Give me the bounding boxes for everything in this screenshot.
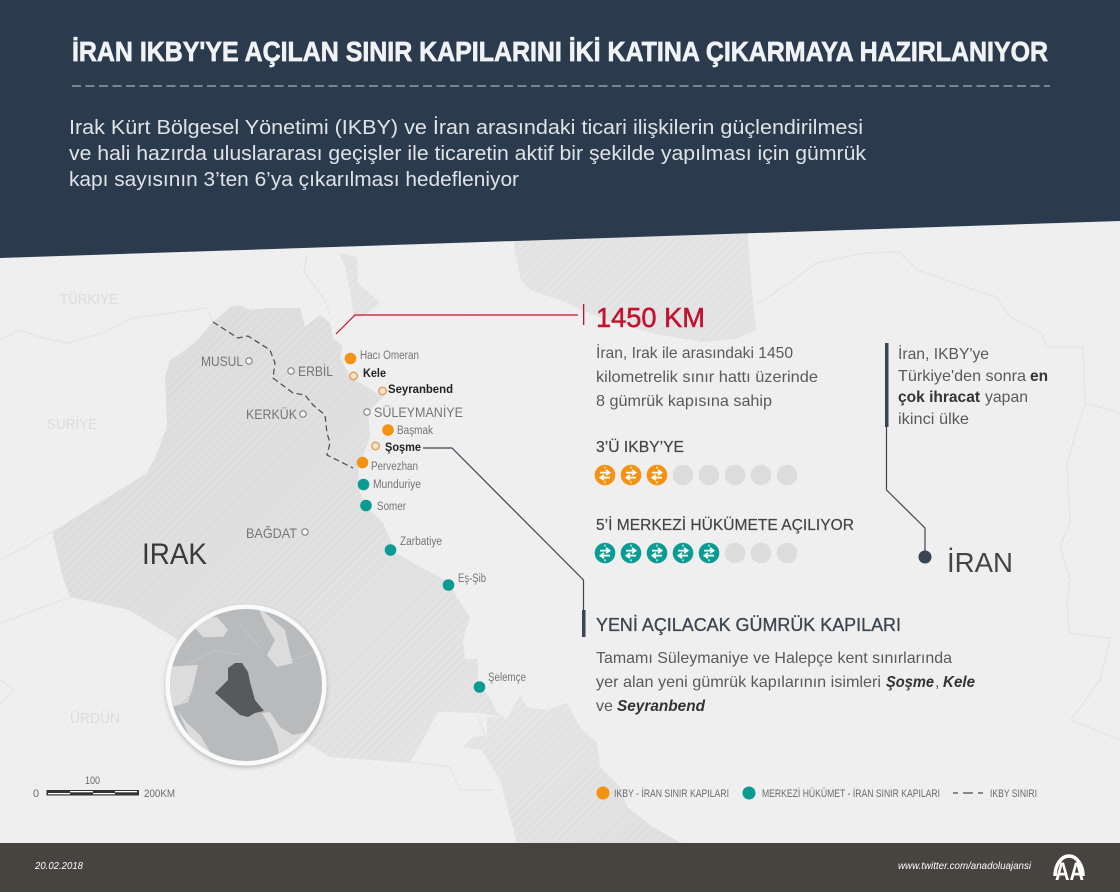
heading: 5 to central government: 5’İ MERKEZİ HÜKÜMETE AÇILIYOR (596, 515, 854, 534)
city labels: KERKÜK (246, 405, 298, 422)
heading: new customs gates: YENİ AÇILACAK GÜMRÜK KAPILARI (596, 615, 901, 635)
intro text (69, 116, 867, 191)
gate labels: Zarbatiye (400, 536, 442, 548)
gate labels: Başmak (397, 425, 433, 437)
text: new gates description: Kele (943, 674, 975, 691)
city labels: ERBİL (298, 362, 333, 379)
map: iraq (52, 305, 507, 763)
gate labels: Munduriye (373, 479, 421, 491)
header panel (0, 0, 1120, 258)
scale bar: 0 (33, 788, 39, 800)
text: new gates description: ve (596, 698, 613, 715)
gate labels: Şoşme (385, 442, 421, 454)
map: diagonal texture (0, 215, 1120, 843)
text: border description: 8 gümrük kapısına sahip (596, 393, 772, 410)
label: IRAK: IRAK (142, 538, 207, 571)
gate labels: Hacı Omeran (360, 350, 419, 362)
city labels: MUSUL (201, 353, 243, 369)
date: 20.02.2018 (34, 860, 83, 872)
gate labels: Eş-Şib (458, 573, 486, 585)
icon row: 5 of 8 gates (595, 543, 797, 563)
text: Iran export note: çok ihracat (898, 389, 981, 406)
intro text: kapı sayısının 3’ten 6’ya çıkarılması hedefleniyor (69, 169, 519, 191)
intro text: ve hali hazırda uluslararası geçişler ile ticaretin aktif bir şekilde yapılması için gümrük (69, 143, 867, 165)
city labels: BAĞDAT (246, 525, 297, 541)
text: Iran export note: İran, IKBY'ye (898, 344, 989, 363)
text: new gates description (596, 650, 975, 715)
gate labels: Şelemçe (488, 672, 526, 684)
text: Iran export note: yapan (985, 389, 1028, 406)
locator globe (165, 604, 330, 770)
icon row: 3 of 8 gates (595, 465, 797, 485)
legend: MERKEZİ HÜKÜMET - İRAN SINIR KAPILARI (762, 787, 940, 800)
label: IRAN: İRAN (947, 547, 1013, 578)
footer bar (0, 843, 1120, 892)
text: Iran export note: ikinci ülke (898, 411, 969, 428)
legend (596, 786, 1037, 800)
callout: new gates leader line (423, 448, 586, 637)
text: new gates description: , (935, 674, 939, 691)
gate labels: Kele (363, 368, 386, 380)
country labels: ÜRDÜN (70, 709, 120, 727)
text: new gates description: Seyranbend (617, 698, 706, 715)
scale bar: 200KM (144, 788, 175, 800)
text: Iran export note (898, 344, 1048, 428)
twitter address: www.twitter.com/anadoluajansi (898, 860, 1032, 872)
legend: IKBY - İRAN SINIR KAPILARI (614, 787, 729, 800)
icon: AA logo: AA (1055, 858, 1084, 886)
country labels: SURİYE (47, 415, 97, 433)
text: border description: İran, Irak ile arasındaki 1450 (596, 343, 793, 362)
scale bar (33, 775, 175, 800)
intro text: Irak Kürt Bölgesel Yönetimi (IKBY) ve İran arasındaki ticari ilişkilerin güçlendirilmesi (69, 116, 863, 139)
map: caspian sea (514, 226, 756, 342)
country labels (47, 290, 120, 727)
country labels: TÜRKİYE (60, 290, 118, 308)
text: new gates description: Tamamı Süleymaniye ve Halepçe kent sınırlarında (596, 650, 952, 667)
IKBY dashed border (213, 322, 353, 468)
border gate markers (345, 353, 485, 693)
heading: 1450 KM: 1450 KM (596, 302, 705, 333)
gate labels: Somer (377, 501, 406, 513)
text: Iran export note: Türkiye'den sonra (898, 368, 1026, 385)
callout: 1450 km leader line (336, 304, 584, 334)
map: faint neighbouring borders (0, 252, 1120, 790)
legend: IKBY SINIRI (990, 788, 1037, 800)
text: new gates description: yer alan yeni gümrük kapılarının isimleri (596, 674, 881, 691)
text: Iran export note: en (1030, 368, 1048, 385)
text: new gates description: Şoşme (886, 674, 934, 691)
callout: Iran leader line (885, 343, 932, 564)
map: persian gulf (463, 695, 681, 843)
text: border description (596, 343, 818, 410)
text: border description: kilometrelik sınır hattı üzerinde (596, 369, 818, 386)
gate labels: Seyranbend (388, 384, 453, 396)
gate labels: Pervezhan (371, 461, 418, 473)
city labels: SÜLEYMANİYE (374, 403, 463, 420)
city labels (201, 353, 463, 541)
scale bar: 100 (85, 775, 100, 787)
map: lake van region (339, 253, 380, 318)
heading: 3 to IKBY: 3’Ü IKBY’YE (596, 438, 684, 456)
gate labels (360, 350, 526, 684)
